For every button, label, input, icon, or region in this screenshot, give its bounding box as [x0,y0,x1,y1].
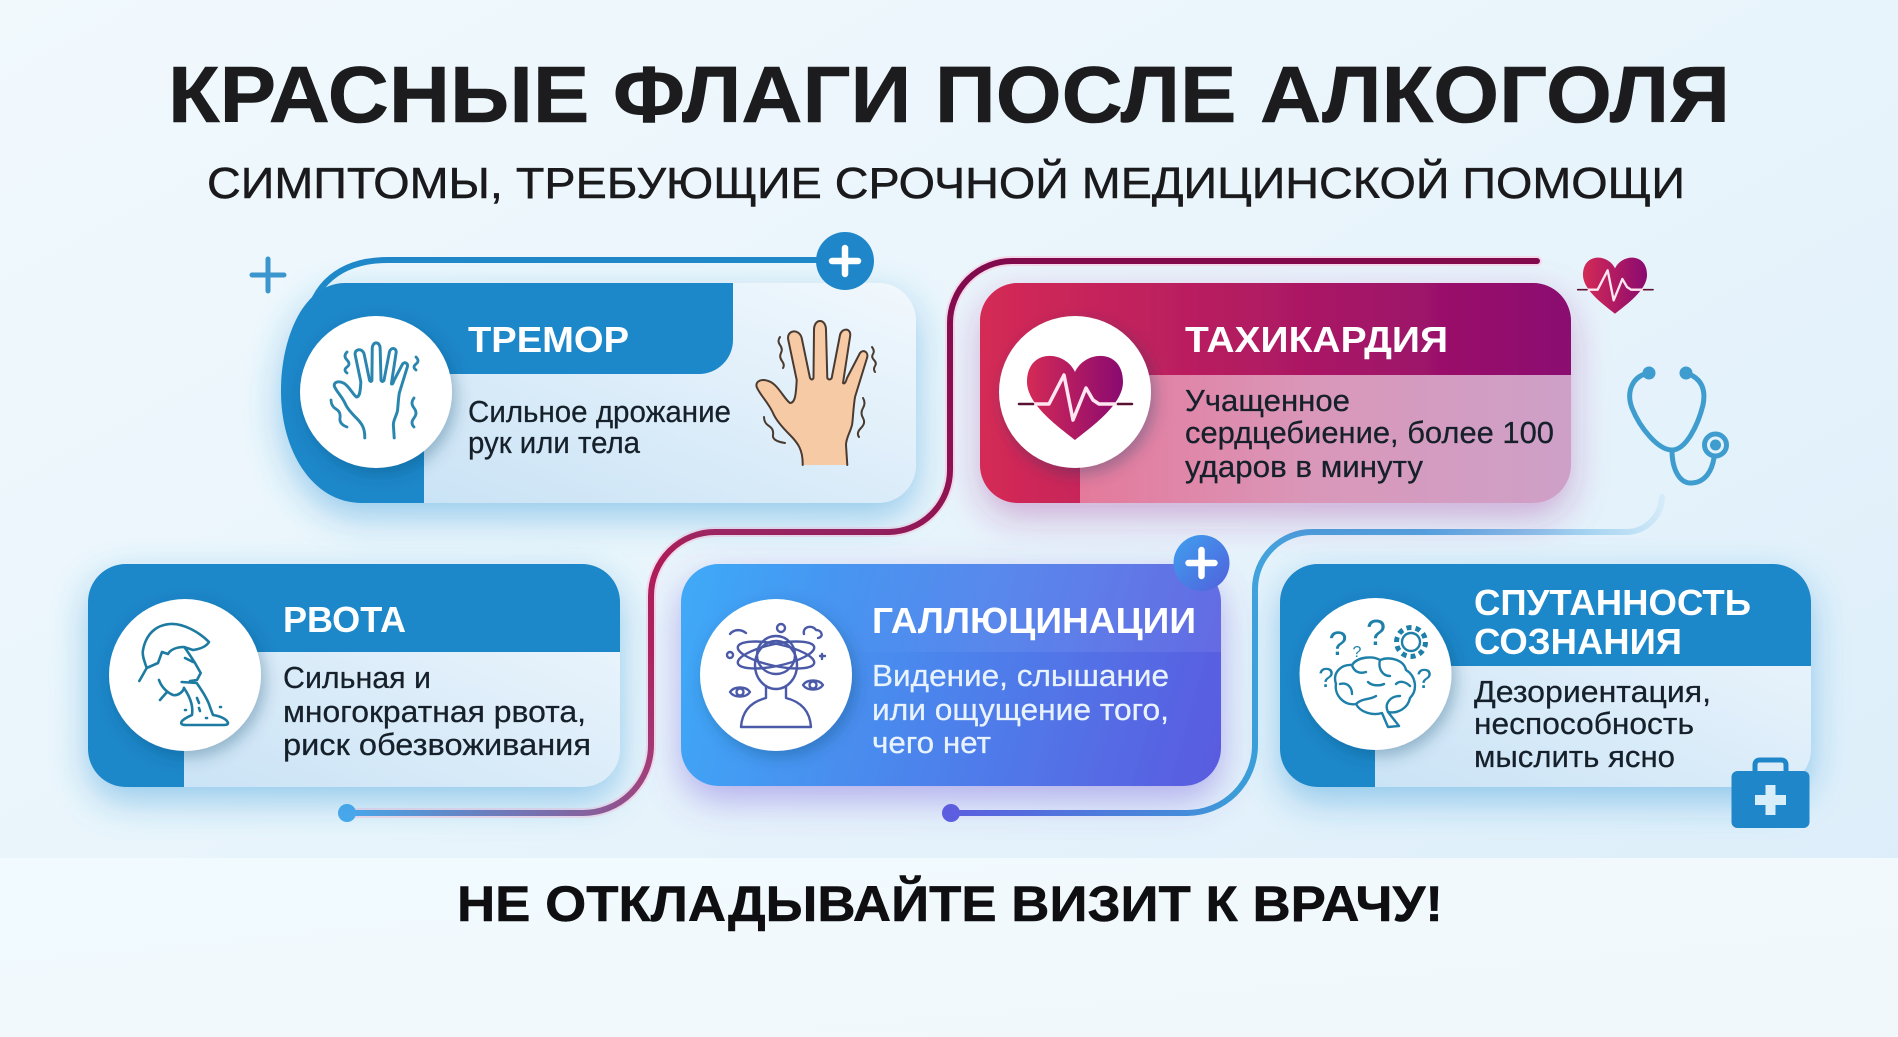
bottom band [0,858,1898,1037]
connector: crimson line from vomiting card to top right [338,261,1537,822]
plus badge [1174,535,1230,591]
icon circle: heart with pulse [999,316,1151,468]
description [1474,674,1711,774]
decorative plus icon [252,259,284,291]
description [872,658,1169,760]
description: чего нет [872,725,991,760]
icon circle: brain with question marks: ? [1416,663,1432,694]
heading: ТРЕМОР [468,319,629,360]
heading: РВОТА [283,599,406,640]
description: мыслить ясно [1474,739,1675,774]
description: многократная рвота, [283,694,586,729]
panel: tachycardia [980,283,1571,503]
card background [980,283,1571,503]
connector: blue line to stethoscope [942,497,1662,822]
icon circle: brain with question marks: ? [1318,662,1334,693]
card background [281,283,916,503]
description [468,394,731,460]
panel: vomiting [88,564,620,787]
panel: tremor [281,232,916,503]
title: КРАСНЫЕ ФЛАГИ ПОСЛЕ АЛКОГОЛЯ [168,50,1730,139]
description: ударов в минуту [1185,449,1423,484]
plus badge [816,232,874,290]
description: рук или тела [468,425,641,460]
heading: ТАХИКАРДИЯ [1185,319,1448,360]
heading: СПУТАННОСТЬ [1474,582,1751,623]
call to action: НЕ ОТКЛАДЫВАЙТЕ ВИЗИТ К ВРАЧУ! [457,875,1443,932]
card background [1280,564,1811,787]
icon: medical kit [1732,760,1810,828]
description: или ощущение того, [872,692,1169,727]
description: неспособность [1474,706,1694,741]
illustration: trembling hand [756,321,876,465]
icon circle: brain with question marks: ? [1366,612,1386,653]
card background [681,564,1221,786]
icon circle: brain with question marks [1300,598,1452,750]
description: Сильное дрожание [468,394,731,429]
panel: confusion [1280,564,1811,828]
icon circle: vomiting person [109,599,261,751]
icon circle: brain with question marks: ? [1353,644,1362,661]
subtitle: СИМПТОМЫ, ТРЕБУЮЩИЕ СРОЧНОЙ МЕДИЦИНСКОЙ ПОМОЩИ [207,157,1685,208]
icon: stethoscope [1630,369,1726,483]
description: Сильная и [283,660,431,695]
panel: hallucinations [681,535,1230,786]
connector: tremor top line [307,260,845,325]
heading: ГАЛЛЮЦИНАЦИИ [872,600,1196,641]
description: риск обезвоживания [283,727,591,762]
description [283,660,591,762]
card background [88,564,620,787]
icon circle: head with orbits [700,599,852,751]
heading: СОЗНАНИЯ [1474,621,1682,662]
heading [1474,582,1751,662]
description [1185,383,1554,484]
icon circle: brain with question marks: ? [1329,625,1347,663]
description: Дезориентация, [1474,674,1711,709]
description: Учащенное [1185,383,1350,418]
description: Видение, слышание [872,658,1169,693]
icon: small heart [1578,258,1653,314]
description: сердцебиение, более 100 [1185,415,1554,450]
icon circle: line hand [300,316,452,468]
